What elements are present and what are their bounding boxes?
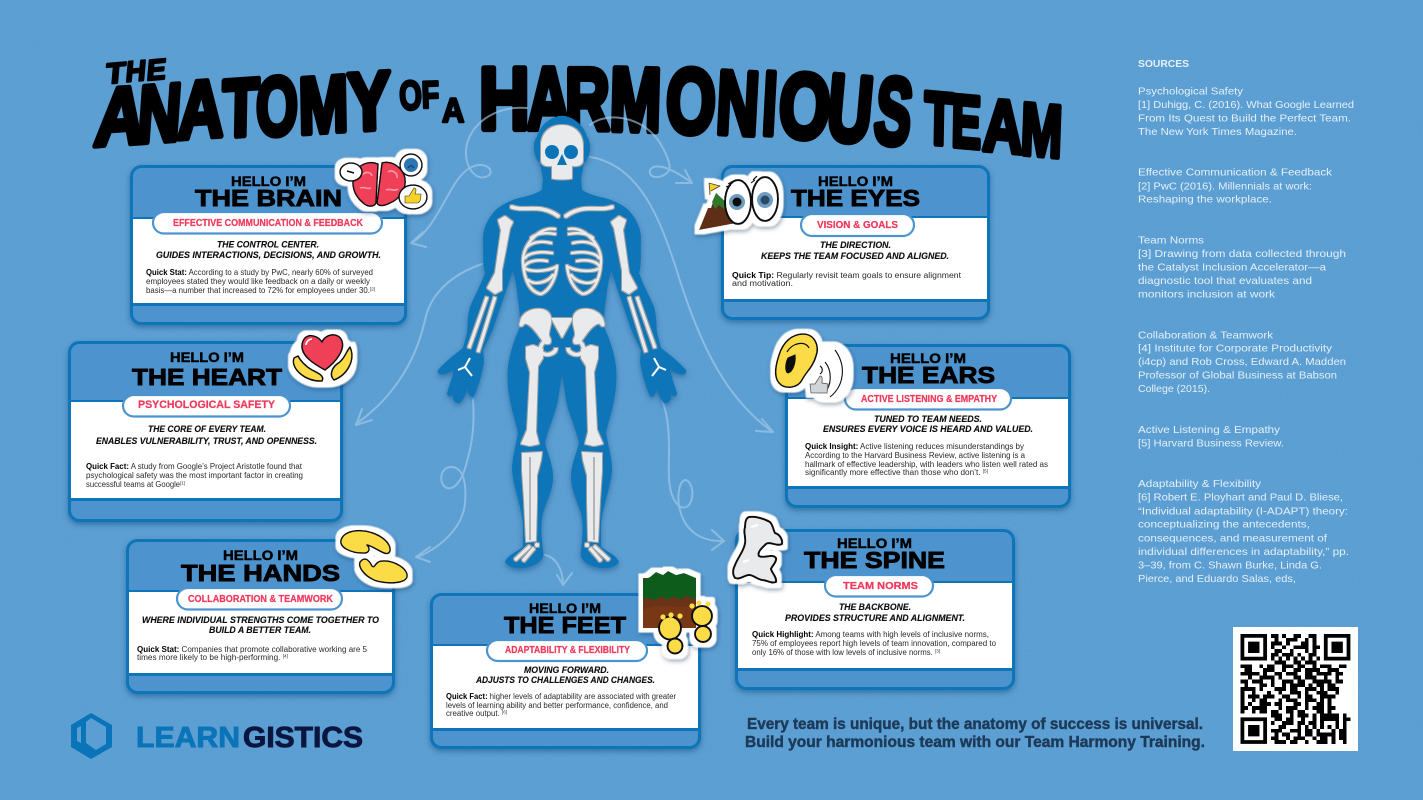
title: A: [527, 50, 570, 148]
quick stat: brain: basis—a number that increased to 72% for employees under 30.: [146, 286, 369, 295]
tagline: heart: [96, 424, 317, 446]
heading: brain: [195, 174, 342, 211]
sources: individual differences in adaptability,” pp.: [1138, 547, 1349, 558]
closing statement: [745, 716, 1205, 751]
pill label: eyes: VISION & GOALS: [817, 219, 898, 231]
sources: Team Norms: [1138, 235, 1204, 246]
tagline: feet: MOVING FORWARD.: [524, 665, 609, 675]
pill label: hands: COLLABORATION & TEAMWORK: [188, 593, 333, 605]
quick stat: hands: times more likely to be high-performing.: [137, 653, 274, 662]
icon: brain sticker: [340, 154, 427, 209]
quick highlight: spine: [3]: [935, 648, 940, 654]
quick stat: hands: Quick Stat: Companies that promote collaborative working are 5: [137, 645, 368, 654]
title: H: [124, 55, 147, 89]
sources: [2] PwC (2016). Millennials at work:: [1138, 181, 1312, 192]
sources: [5] Harvard Business Review.: [1138, 439, 1284, 450]
heading: spine: HELLO I’M: [837, 536, 912, 551]
title: Y: [347, 54, 392, 149]
heading: feet: THE FEET: [504, 612, 627, 638]
title: O: [776, 53, 834, 159]
heading: ears: HELLO I’M: [890, 351, 966, 366]
quick fact: feet: [446, 692, 676, 718]
tagline: spine: [785, 602, 965, 623]
sources: 3–39, from C. Shawn Burke, Linda G.: [1138, 560, 1322, 571]
tagline: brain: GUIDES INTERACTIONS, DECISIONS, AND GROWTH.: [156, 250, 381, 260]
icon: eyes sticker: [699, 176, 778, 230]
title: A: [981, 83, 1025, 169]
sources: Professor of Global Business at Babson: [1138, 371, 1337, 382]
heading: spine: [804, 536, 945, 573]
left half bones: [469, 207, 573, 561]
quick fact: feet: creative output.: [446, 709, 499, 718]
title: E: [145, 54, 167, 88]
sources: [6] Robert E. Ployhart and Paul D. Bliese,: [1138, 493, 1343, 504]
quick insight: ears: Quick Insight: Active listening reduces misunderstandings by: [805, 442, 1024, 451]
heading: eyes: HELLO I’M: [818, 174, 893, 189]
sources: [4] Institute for Corporate Productivity: [1138, 344, 1333, 355]
title: A: [91, 69, 150, 163]
pill: heart: [123, 395, 290, 416]
sources: Psychological Safety: [1138, 86, 1244, 98]
heading: spine: THE SPINE: [804, 547, 945, 573]
logo: Learngistics: [71, 713, 363, 759]
arrow: chest to heart: [356, 264, 482, 425]
skull: [541, 125, 583, 180]
tagline: eyes: THE DIRECTION.: [820, 240, 891, 250]
heading: hands: HELLO I’M: [223, 548, 298, 563]
logo icon: [71, 713, 112, 759]
title: O: [256, 59, 298, 154]
panel: hands: [128, 540, 394, 692]
tagline: ears: [823, 414, 1033, 434]
quick stat: brain: [2]: [370, 286, 375, 292]
heading: heart: HELLO I’M: [170, 350, 244, 365]
title: T: [104, 56, 127, 91]
title: T: [924, 77, 954, 162]
icon: feet sticker: [643, 571, 712, 654]
sources: Adaptability & Flexibility: [1138, 479, 1262, 490]
quick highlight: spine: [752, 630, 997, 657]
quick insight: ears: significantly more effective than those who don’t.: [805, 468, 973, 477]
tagline: ears: TUNED TO TEAM NEEDS.: [874, 414, 982, 424]
icon: hands sticker: [341, 531, 407, 583]
sources: [1] Duhigg, C. (2016). What Google Learned: [1138, 100, 1354, 111]
pill: brain: [153, 212, 382, 234]
logo wordmark: LEARN: [136, 722, 240, 754]
heading: ears: [862, 351, 995, 388]
tagline: brain: THE CONTROL CENTER.: [217, 240, 319, 250]
heading: hands: [181, 548, 340, 586]
quick stat: hands: [137, 645, 368, 662]
title: M: [298, 58, 349, 151]
closing statement: Every team is unique, but the anatomy of success is universal.: [747, 716, 1203, 733]
human body with skeleton: [438, 116, 686, 568]
quick insight: ears: [5]: [983, 468, 988, 474]
arrow: head to eyes: [590, 117, 692, 183]
tagline: hands: WHERE INDIVIDUAL STRENGTHS COME TOGETHER TO: [142, 615, 379, 625]
title: T: [222, 62, 260, 155]
pill label: heart: PSYCHOLOGICAL SAFETY: [138, 399, 275, 411]
sources: [3] Drawing from data collected through: [1138, 249, 1346, 260]
title: N: [135, 67, 184, 161]
icon: ear sticker: [776, 334, 849, 398]
heading: hands: THE HANDS: [181, 560, 340, 586]
sources: Effective Communication & Feedback: [1138, 168, 1333, 179]
logo: Learngistics: GISTICS: [243, 722, 363, 754]
tagline: heart: ENABLES VULNERABILITY, TRUST, AND OPENNESS.: [96, 436, 317, 446]
right half bones: [566, 207, 666, 561]
title: O: [664, 48, 718, 153]
heading: feet: [504, 601, 627, 638]
tagline: feet: [475, 665, 655, 685]
title: I: [760, 52, 780, 154]
sources: Pierce, and Eduardo Salas, eds,: [1138, 574, 1296, 585]
tagline: ears: ENSURES EVERY VOICE IS HEARD AND VALUED.: [823, 424, 1033, 434]
sources heading: SOURCES: [1138, 59, 1189, 70]
tagline: spine: PROVIDES STRUCTURE AND ALIGNMENT.: [785, 613, 965, 623]
quick tip: eyes: Quick Tip: Regularly revisit team goals to ensure alignment: [732, 271, 962, 280]
arrow: chest to ears: [590, 157, 773, 432]
quick insight: ears: [805, 442, 1048, 477]
quick stat: brain: Quick Stat: According to a study by PwC, nearly 60% of surveyed: [146, 268, 373, 277]
arrow: hand to hands card: [416, 400, 474, 562]
sources: Reshaping the workplace.: [1138, 195, 1272, 206]
arrow: hand to spine card: [662, 400, 724, 550]
pill label: spine: TEAM NORMS: [843, 580, 918, 592]
title: F: [421, 74, 440, 117]
quick stat: brain: [146, 268, 375, 295]
heading: ears: THE EARS: [862, 362, 995, 388]
quick fact: heart: [1]: [180, 480, 185, 486]
quick fact: heart: successful teams at Google: [86, 480, 182, 489]
sources: consequences, and measurement of: [1138, 533, 1327, 544]
sources: Collaboration & Teamwork: [1138, 330, 1274, 342]
tagline: hands: BUILD A BETTER TEAM.: [209, 625, 311, 635]
quick fact: feet: Quick Fact: higher levels of adaptability are associated with greater: [446, 692, 676, 701]
tagline: brain: [156, 240, 381, 260]
panel: ears: [786, 346, 1070, 506]
quick fact: feet: levels of learning ability and better performance, confidence, and: [446, 701, 668, 710]
title: R: [565, 51, 610, 149]
title: M: [1019, 88, 1064, 174]
arrow: head to brain: [411, 108, 527, 247]
tagline: eyes: [761, 240, 949, 261]
title: E: [951, 80, 982, 166]
quick fact: heart: Quick Fact: A study from Google’s Project Aristotle found that: [86, 462, 303, 471]
heading: feet: HELLO I’M: [529, 601, 601, 616]
sources: [1138, 59, 1354, 585]
arrow: foot to feet card: [545, 555, 572, 585]
tagline: hands: [142, 615, 379, 635]
pill: feet: [487, 640, 647, 661]
quick highlight: spine: Quick Highlight: Among teams with high levels of inclusive norms,: [752, 630, 989, 639]
panel: brain: [132, 166, 406, 324]
quick stat: brain: employees stated they would like feedback on a daily or weekly: [146, 277, 370, 286]
title: U: [823, 54, 877, 163]
pill label: feet: ADAPTABILITY & FLEXIBILITY: [505, 644, 630, 656]
tagline: feet: ADJUSTS TO CHALLENGES AND CHANGES.: [475, 675, 655, 685]
quick tip: eyes: and motivation.: [732, 279, 793, 288]
heading: eyes: [791, 174, 920, 211]
panel: spine: [736, 530, 1014, 688]
sources: the Catalyst Inclusion Accelerator—a: [1138, 262, 1326, 273]
title: [91, 48, 1064, 174]
panel: eyes: [722, 166, 988, 318]
title: S: [870, 58, 917, 167]
sources: “Individual adaptability (I-ADAPT) theory:: [1138, 506, 1348, 517]
pill: spine: [825, 575, 933, 596]
closing statement: Build your harmonious team with our Team Harmony Training.: [745, 734, 1205, 751]
title: H: [479, 49, 530, 148]
title: N: [714, 53, 762, 155]
tagline: heart: THE CORE OF EVERY TEAM.: [148, 424, 266, 434]
pill label: ears: ACTIVE LISTENING & EMPATHY: [861, 393, 997, 405]
heading: brain: THE BRAIN: [195, 185, 342, 211]
tagline: eyes: KEEPS THE TEAM FOCUSED AND ALIGNED.: [761, 251, 949, 261]
icon: heart sticker: [293, 335, 352, 383]
pill label: brain: EFFECTIVE COMMUNICATION & FEEDBACK: [173, 217, 363, 229]
quick stat: hands: [4]: [283, 654, 288, 658]
title: A: [442, 92, 464, 129]
quick highlight: spine: only 16% of those with low levels of inclusive norms.: [752, 648, 933, 657]
icon: spine sticker: [733, 517, 782, 583]
sources: From Its Quest to Build the Perfect Team.: [1138, 114, 1351, 125]
sources: College (2015).: [1138, 384, 1210, 395]
sources: monitors inclusion at work: [1138, 290, 1276, 301]
body silhouette: [438, 116, 686, 568]
quick insight: ears: hallmark of effective leadership, with leaders who listen well rated as: [805, 460, 1048, 469]
quick tip: eyes: [732, 271, 962, 288]
quick insight: ears: According to the Harvard Business Review, active listening is a: [805, 451, 1026, 460]
heading: heart: [132, 350, 283, 390]
quick fact: heart: [86, 462, 303, 489]
QR code: [1233, 627, 1358, 751]
quick highlight: spine: 75% of employees report high levels of team innovation, compared to: [752, 639, 997, 648]
sources: (i4cp) and Rob Cross, Edward A. Madden: [1138, 357, 1346, 368]
pill: hands: [177, 588, 342, 610]
quick fact: heart: psychological safety was the most important factor in creating: [86, 471, 303, 480]
pill: ears: [845, 388, 1011, 410]
sources: The New York Times Magazine.: [1138, 127, 1297, 138]
quick fact: feet: [6]: [502, 710, 507, 714]
heading: heart: THE HEART: [132, 364, 283, 390]
tagline: spine: THE BACKBONE.: [839, 602, 911, 612]
title: M: [608, 50, 663, 151]
title: A: [176, 62, 226, 157]
heading: brain: HELLO I’M: [231, 174, 306, 189]
sources: diagnostic tool that evaluates and: [1138, 276, 1312, 287]
sources: conceptualizing the antecedents,: [1138, 520, 1310, 531]
panel: heart: [70, 342, 342, 520]
pill: eyes: [801, 214, 914, 236]
heading: eyes: THE EYES: [791, 185, 920, 211]
sources: Active Listening & Empathy: [1138, 425, 1281, 436]
title: O: [398, 72, 423, 119]
panel: feet: [432, 594, 700, 748]
